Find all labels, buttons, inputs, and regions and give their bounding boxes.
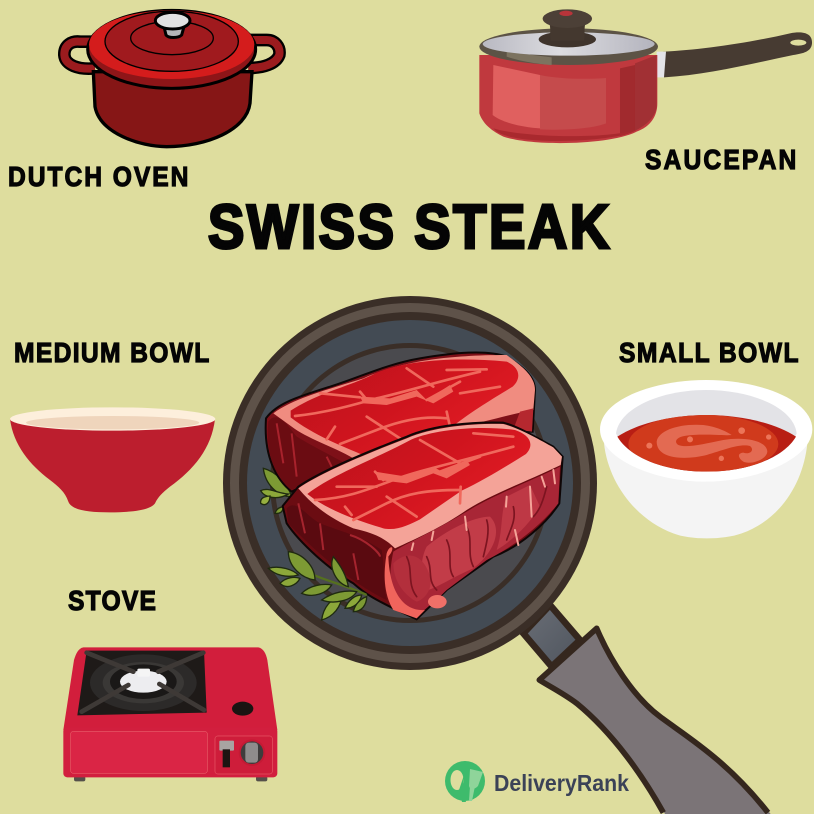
bowl rim (10, 407, 215, 431)
lid knob (164, 27, 184, 37)
lid glass (483, 32, 655, 56)
back steak (266, 352, 535, 492)
front steak top (307, 428, 530, 529)
icon: small bowl (600, 380, 812, 538)
stove front panel (63, 727, 277, 777)
logo: DeliveryRank (445, 761, 629, 802)
icon: medium bowl (10, 407, 215, 512)
lid (88, 10, 256, 88)
spoon (450, 770, 464, 790)
handle outline (539, 628, 768, 813)
lid knob (539, 31, 596, 47)
icon: stove (63, 647, 277, 781)
pan rim (223, 296, 597, 670)
igniter hole (232, 702, 253, 716)
herb sprig: lower (268, 552, 367, 620)
label: dutch oven: DUTCH OVEN (8, 161, 188, 192)
burner rings (90, 654, 197, 711)
control panel outline (215, 736, 272, 774)
front steak marbling (315, 433, 513, 520)
label: small bowl: SMALL BOWL (619, 337, 799, 368)
lid rim (479, 28, 658, 65)
handle grip (539, 628, 771, 814)
sauce (613, 413, 800, 473)
pan body (479, 55, 657, 143)
herb sprig: upper (261, 468, 292, 513)
bowl exterior (604, 443, 807, 538)
front steak (283, 422, 563, 619)
fork (469, 769, 483, 789)
front steak muscle texture (407, 487, 547, 597)
front steak marbling splashes (375, 460, 470, 483)
illustration: steaks and herbs (261, 352, 563, 620)
icon: dutch oven (64, 10, 280, 147)
back steak top (291, 360, 518, 455)
back steak marbling (295, 368, 500, 444)
bowl exterior (10, 419, 215, 512)
burner recess (77, 651, 207, 715)
sauce swirl (657, 425, 767, 463)
drawer outline (71, 731, 207, 773)
back steak marbling splashes (360, 385, 453, 405)
right handle (248, 40, 280, 68)
grate bars (82, 653, 204, 712)
handle bracket (652, 52, 666, 77)
pan handle (523, 605, 771, 814)
pot body (93, 72, 252, 147)
stove top plate (63, 647, 277, 730)
pan surface (247, 320, 573, 646)
burner cap (120, 671, 167, 693)
bowl rim (600, 380, 812, 482)
left handle (64, 42, 97, 69)
front steak drips (412, 470, 555, 550)
bowl inner wall (616, 390, 797, 472)
handle neck (523, 605, 580, 667)
label: saucepan: SAUCEPAN (645, 144, 796, 175)
handle (663, 32, 812, 77)
icon: frying pan (223, 296, 771, 814)
logo wordmark: DeliveryRank (494, 770, 629, 796)
front steak fat (298, 424, 562, 548)
front steak right face (390, 467, 560, 617)
label: stove: STOVE (68, 585, 156, 616)
slider (219, 741, 234, 751)
stove feet (74, 776, 85, 781)
front steak left shadow (287, 505, 387, 600)
back steak fat (273, 355, 535, 458)
dial (239, 739, 265, 766)
bowl interior (26, 416, 199, 429)
title: SWISS STEAK (208, 193, 609, 262)
label: medium bowl: MEDIUM BOWL (14, 337, 209, 368)
back steak side shading (268, 417, 345, 490)
icon: saucepan (479, 9, 812, 143)
front steak pink edge (385, 547, 425, 618)
logo icon (445, 761, 485, 802)
